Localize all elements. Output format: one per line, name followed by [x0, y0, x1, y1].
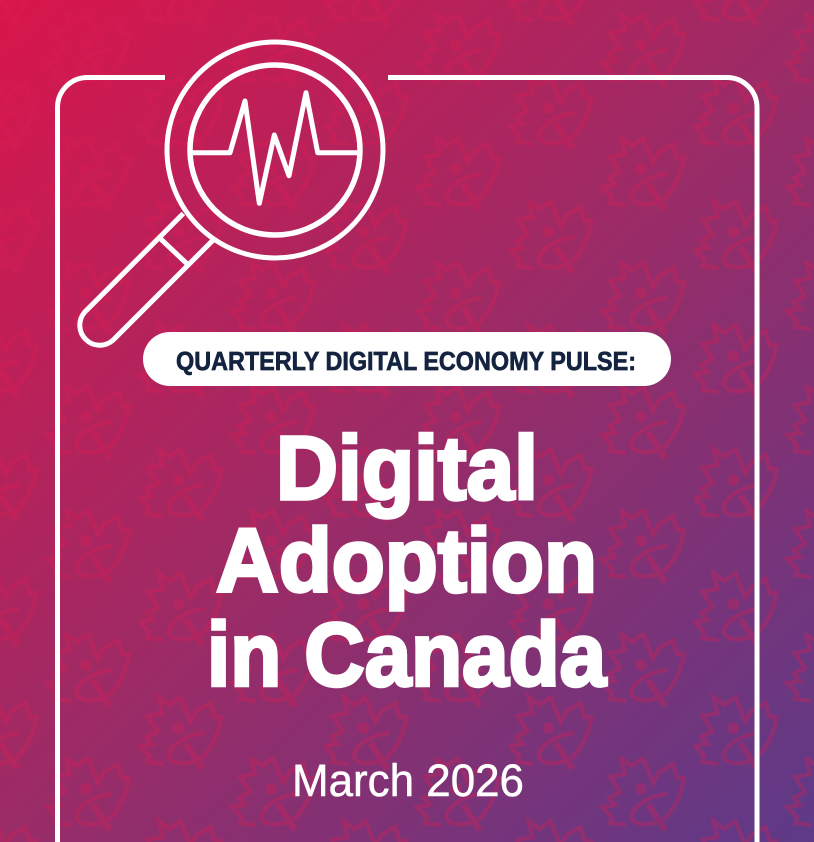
date: March 2026 [292, 755, 524, 806]
title: Adoption [216, 512, 597, 612]
subtitle pill [143, 332, 671, 386]
title: in Canada [207, 606, 607, 706]
subtitle pill: QUARTERLY DIGITAL ECONOMY PULSE: [176, 346, 636, 376]
title [207, 419, 607, 706]
title: Digital [276, 419, 538, 519]
white rounded frame [58, 78, 757, 842]
icon: magnifying glass with pulse line [80, 42, 383, 345]
